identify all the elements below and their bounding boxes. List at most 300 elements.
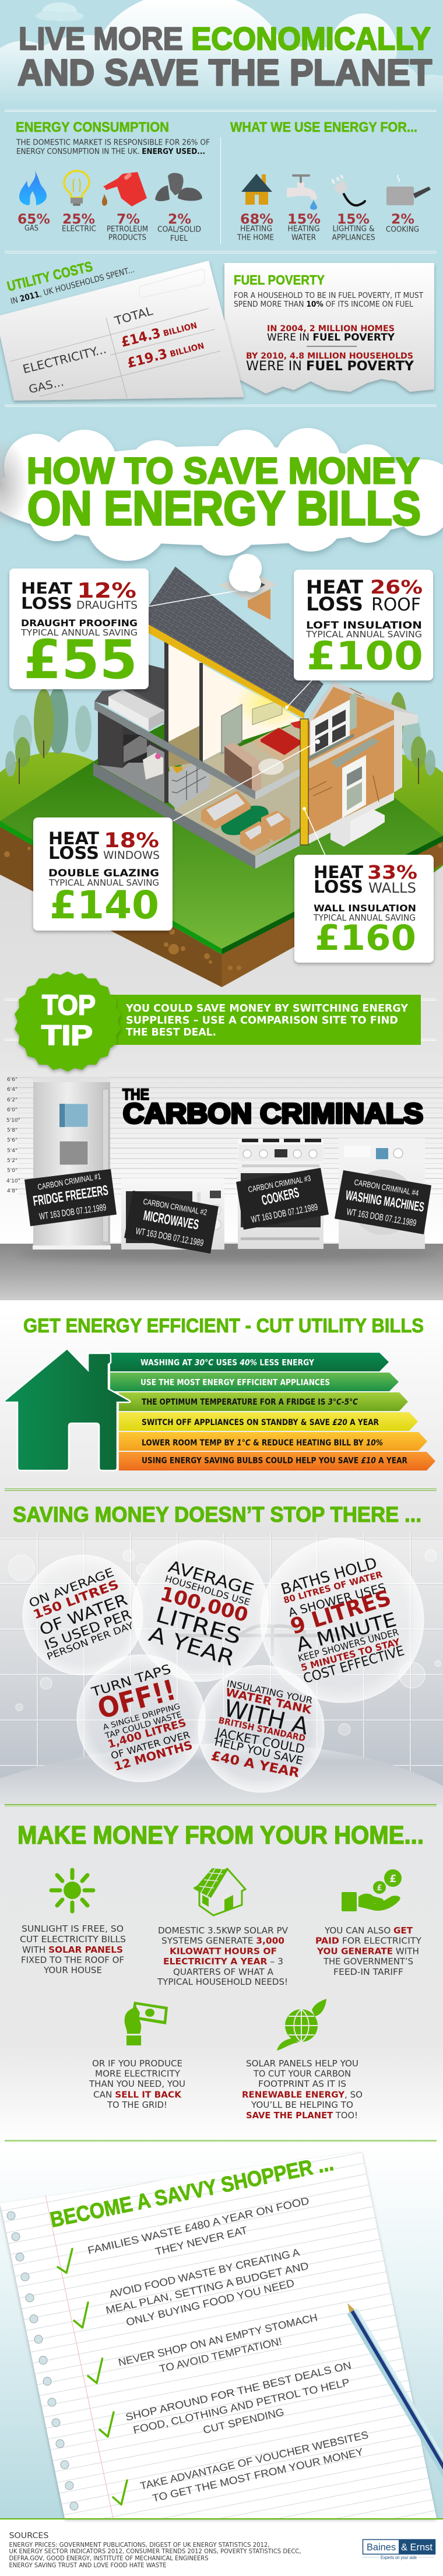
stat: heating the home 68%: THE HOME <box>237 234 274 243</box>
callout: roof: £100 <box>307 633 423 679</box>
text: solar pv systems <box>157 1925 289 1987</box>
upper walls <box>164 640 306 803</box>
sources: DEFRA.GOV, GOOD ENERGY, INSTITUTE OF MECHANICAL ENGINEERS <box>9 2555 209 2562</box>
stat: electric 25% <box>62 212 96 233</box>
bubble: water tank jacket: WITH A <box>222 1695 311 1740</box>
appliance shadows <box>17 1245 437 1262</box>
bed and wardrobe <box>224 721 300 794</box>
bubble: 150 litres <box>23 1555 143 1675</box>
icon: light bulb <box>64 171 89 206</box>
stat: cooking 2%: 2% <box>391 212 414 227</box>
scene: hills and trees <box>0 686 443 885</box>
appliance: washing machine <box>339 1138 425 1249</box>
text: sunlight is free: WITH SOLAR PANELS <box>22 1945 123 1955</box>
clouds behind the title <box>0 0 443 137</box>
text: sunlight is free: CUT ELECTRICITY BILLS <box>20 1934 126 1945</box>
placard: microwaves: MICROWAVES <box>142 1208 200 1233</box>
placard: cookers: COOKERS <box>260 1185 301 1209</box>
height chart wall: 4'8" <box>7 1188 17 1194</box>
bubble: baths and showers: KEEP SHOWERS UNDER <box>297 1626 400 1664</box>
heading: fuel poverty: FUEL POVERTY <box>234 272 325 287</box>
gable wall with brickwork <box>308 681 418 847</box>
intro text <box>16 139 210 156</box>
placard: microwaves: WT 163 DOB 07.12.1989 <box>135 1226 204 1248</box>
bubble: baths and showers: BATHS HOLD <box>279 1554 379 1599</box>
stat: electric 25%: 25% <box>62 212 95 227</box>
stat: gas 65%: 65% <box>17 212 50 227</box>
arrow: energy saving bulbs: USING ENERGY SAVING BULBS COULD HELP YOU SAVE £10 A YEAR <box>142 1457 407 1466</box>
stat: heating water 15% <box>287 212 321 243</box>
placard: washing machines: CARBON CRIMINAL #4 <box>353 1177 420 1198</box>
bubble: baths and showers: A MINUTE <box>294 1608 399 1656</box>
bubble: baths and showers: COST EFFECTIVE <box>301 1643 406 1687</box>
stat: coal 2%: COAL/SOLID <box>157 226 201 234</box>
window <box>309 692 357 760</box>
text: solar panels help: TO CUT YOUR CARBON <box>253 2069 351 2079</box>
floor beam <box>94 701 300 800</box>
stat: 2010: BY 2010, 4.8 MILLION HOUSEHOLDS <box>246 352 413 361</box>
callout: windows: WINDOWS <box>103 849 160 862</box>
placard: microwaves: CARBON CRIMINAL #2 <box>142 1196 208 1217</box>
plant and flowers <box>155 753 183 773</box>
tick: empty stomach: TO AVOID TEMPTATION! <box>158 2335 283 2375</box>
row: gas: £19.3 BILLION <box>125 337 206 371</box>
callout: roof: LOFT INSULATION <box>306 620 422 631</box>
heading: how to save money <box>27 451 421 535</box>
bubble: water tank jacket: WATER TANK <box>224 1686 314 1717</box>
text: sell it back: OR IF YOU PRODUCE <box>92 2058 182 2069</box>
definition text: SPEND MORE THAN 10% OF ITS INCOME ON FUEL <box>234 300 414 309</box>
text: feed-in tariff: YOU GENERATE WITH <box>317 1946 419 1957</box>
icon: globe with leaves <box>277 1999 326 2051</box>
icon: house <box>241 174 272 205</box>
text: solar pv systems: KILOWATT HOURS OF <box>170 1946 277 1957</box>
callout: draughts: TYPICAL ANNUAL SAVING <box>20 627 138 638</box>
heading: how to save money: HOW TO SAVE MONEY <box>27 451 420 492</box>
icon: ballpoint pen <box>342 2300 443 2515</box>
callout: draughts: 12% <box>77 579 136 603</box>
arrow: standby <box>119 1412 418 1431</box>
stat: lighting and appliances 15%: 15% <box>337 212 370 227</box>
icon: coal <box>155 173 202 201</box>
icon: green house <box>5 1349 130 1471</box>
arrow: washing: WASHING AT 30°C USES 40% LESS ENERGY <box>140 1359 315 1368</box>
text: feed-in tariff: PAID FOR ELECTRICITY <box>315 1936 422 1946</box>
tick: shop around: SHOP AROUND FOR THE BEST DEALS ON <box>124 2359 353 2423</box>
callout: walls <box>294 855 434 963</box>
stat: heating the home 68%: 68% <box>240 212 273 227</box>
bubble: water tank jacket: INSULATING YOUR <box>226 1678 314 1706</box>
text: solar panels help: FOOTPRINT AS IT IS <box>258 2079 346 2089</box>
callout: windows: DOUBLE GLAZING <box>48 868 159 879</box>
logo: Baines & Ernst: Experts on your side <box>381 2555 417 2560</box>
item: solar pv <box>157 1868 289 1987</box>
bubble: baths and showers: 80 LITRES OF WATER <box>282 1569 384 1606</box>
stat: coal 2%: 2% <box>168 212 191 227</box>
tick: shop around: FOOD, CLOTHING AND PETROL TO HELP <box>132 2376 351 2436</box>
callout: walls: WALLS <box>368 880 416 896</box>
bubble: 150 litres: OF WATER <box>37 1591 130 1640</box>
arrow: fridge temperature: THE OPTIMUM TEMPERATURE FOR A FRIDGE IS 3°C-5°C <box>142 1398 358 1407</box>
row: gas <box>27 337 206 396</box>
item: sunlight <box>20 1870 126 1975</box>
stat: lighting and appliances 15%: LIGHTING & <box>332 225 374 233</box>
bubble: baths and showers: 5 MINUTES TO STAY <box>300 1636 401 1673</box>
torn punch holes <box>7 2212 78 2510</box>
callout: roof: HEAT <box>306 576 363 598</box>
bubble: baths and showers <box>261 1538 424 1703</box>
stat: petroleum 7%: PRODUCTS <box>108 234 146 243</box>
placard: fridge freezers: CARBON CRIMINAL #1 <box>37 1171 102 1192</box>
stat: lighting and appliances 15%: APPLIANCES <box>332 234 375 243</box>
bubble: 100,000 litres <box>132 1540 269 1682</box>
bubble: turn taps off <box>77 1655 205 1782</box>
icon: petrol can <box>102 172 147 206</box>
definition text <box>234 292 423 309</box>
row: electricity: £14.3 BILLION <box>119 317 198 350</box>
callout: roof: ROOF <box>371 595 421 615</box>
bubble: baths and showers: A SHOWER USES <box>287 1580 387 1620</box>
tick: meal plan: MEAL PLAN, SETTING A BUDGET AND <box>105 2260 310 2316</box>
icon: hand with coins <box>342 1869 402 1911</box>
callout: windows: £140 <box>50 883 159 928</box>
height chart wall: 6'2" <box>7 1097 17 1103</box>
placard: washing machines <box>335 1170 431 1234</box>
stat: 2010: WERE IN FUEL POVERTY <box>246 359 414 374</box>
bill sheet <box>0 261 244 401</box>
text: solar pv systems: ELECTRICITY A YEAR – 3 <box>163 1956 283 1967</box>
tip text <box>125 1002 409 1038</box>
heading cloud with chimney smoke <box>0 428 443 592</box>
appliance: fridge freezer <box>33 1078 111 1250</box>
appliance: cooker <box>238 1139 324 1249</box>
text: sunlight is free: SUNLIGHT IS FREE, SO <box>22 1924 124 1934</box>
bubble: 150 litres: 150 LITRES <box>31 1577 121 1622</box>
note paper <box>0 2152 437 2518</box>
sources <box>9 2532 301 2569</box>
arrow: room temperature <box>119 1432 427 1451</box>
bubble: turn taps off: TURN TAPS <box>89 1662 173 1700</box>
badge text: TIP <box>41 1020 93 1051</box>
stat: petroleum 7%: 7% <box>117 212 140 227</box>
callout: walls: TYPICAL ANNUAL SAVING <box>313 913 416 923</box>
text: solar pv systems: TYPICAL HOUSEHOLD NEEDS! <box>157 1977 288 1987</box>
tick: meal plan: ONLY BUYING FOOD YOU NEED <box>125 2277 296 2328</box>
placard: fridge freezers: WT 163 DOB 07.12.1989 <box>38 1203 107 1222</box>
illustration: cutaway house <box>93 567 418 869</box>
tick list <box>58 2195 370 2505</box>
icon: hand with banknotes <box>125 2002 168 2045</box>
bubble: water tank jacket: HELP YOU SAVE <box>213 1735 304 1767</box>
row: gas: GAS... <box>27 375 65 396</box>
stat: heating the home 68% <box>237 212 274 243</box>
small bubbles <box>9 1550 441 1735</box>
placard: cookers: WT 163 DOB 07.12.1989 <box>251 1202 319 1225</box>
steps <box>331 809 385 847</box>
text: feed-in tariff: THE GOVERNMENT’S <box>323 1956 413 1967</box>
text: solar panels help: SAVE THE PLANET TOO! <box>246 2110 358 2121</box>
heading: the carbon criminals <box>122 1086 423 1129</box>
title: LIVE MORE ECONOMICALLY <box>19 20 431 57</box>
text: sell it back: MORE ELECTRICITY <box>95 2069 181 2079</box>
text: solar pv systems: DOMESTIC 3.5KWP SOLAR PV <box>158 1925 289 1936</box>
bubble: 100,000 litres: 100,000 <box>158 1582 251 1627</box>
placard: fridge freezers: FRIDGE FREEZERS <box>32 1182 109 1209</box>
height chart wall: 5'4" <box>7 1148 17 1154</box>
panel: utility costs bill <box>0 259 244 401</box>
bubble: water tank jacket: BRITISH STANDARD <box>217 1715 307 1744</box>
chimney <box>219 573 276 620</box>
callout: roof: 26% <box>370 576 423 598</box>
text: sell it back: THAN YOU NEED, YOU <box>89 2079 185 2089</box>
definition text: FOR A HOUSEHOLD TO BE IN FUEL POVERTY, IT MUST <box>234 292 423 300</box>
callout lines <box>149 590 325 855</box>
callout: walls: £160 <box>315 918 416 959</box>
text: solar panels help: RENEWABLE ENERGY, SO <box>242 2090 363 2100</box>
panel: fuel poverty <box>224 263 434 394</box>
bubble: turn taps off: OFF!! <box>94 1673 179 1726</box>
tick: shop around: CUT SPENDING <box>202 2406 285 2436</box>
height chart wall: 6'4" <box>7 1087 17 1093</box>
text: solar panels help <box>242 2058 363 2121</box>
tick: food waste <box>58 2195 310 2273</box>
item: sell it back <box>89 2002 185 2110</box>
callout: top tip <box>15 971 421 1072</box>
title <box>17 20 432 93</box>
callout: draughts: £55 <box>23 629 138 691</box>
heading: the carbon criminals: THE <box>122 1086 149 1103</box>
icon: hand with coins: £ <box>377 1884 382 1893</box>
callout: walls: WALL INSULATION <box>314 903 416 914</box>
sources: ENERGY PRICES: GOVERNMENT PUBLICATIONS, DIGEST OF UK ENERGY STATISTICS 2012, <box>9 2542 269 2549</box>
door <box>331 738 379 818</box>
badge <box>15 971 121 1072</box>
sources: SOURCES <box>9 2532 49 2540</box>
callout: windows: HEAT <box>48 829 99 848</box>
heading: utility costs: UTILITY COSTS <box>6 259 94 294</box>
heading: the carbon criminals: CARBON CRIMINALS <box>123 1099 423 1129</box>
height chart wall: 5'0" <box>7 1168 17 1174</box>
arrow: room temperature: LOWER ROOM TEMP BY 1°C & REDUCE HEATING BILL BY 10% <box>142 1438 383 1448</box>
bubble: 100,000 litres: AVERAGE <box>166 1557 256 1599</box>
panel: energy consumption <box>16 120 210 243</box>
banner <box>109 995 421 1045</box>
callout: draughts <box>9 568 149 691</box>
placard: fridge freezers <box>24 1169 117 1226</box>
icon: solar house <box>194 1868 245 1915</box>
row: electricity: ELECTRICITY... <box>21 342 108 376</box>
callout: windows: 18% <box>104 829 159 852</box>
text: sell it back <box>89 2058 185 2110</box>
sources: UK ENERGY SECTOR INDICATORS 2012, CONSUMER TRENDS 2012 ONS, POVERTY STATISTICS DECC, <box>9 2548 301 2555</box>
appliance: microwave <box>121 1178 224 1250</box>
title: AND SAVE THE PLANET <box>17 52 432 93</box>
height chart wall: 6'6" <box>7 1077 17 1083</box>
text: solar pv systems: QUARTERS OF WHAT A <box>173 1967 274 1977</box>
callout: windows: TYPICAL ANNUAL SAVING <box>48 878 159 888</box>
height chart wall: 5'8" <box>7 1128 17 1133</box>
stat: petroleum 7%: PETROLEUM <box>107 225 148 234</box>
stat: 2004: IN 2004, 2 MILLION HOMES <box>267 324 395 334</box>
bubble: turn taps off: A SINGLE DRIPPING <box>102 1702 181 1732</box>
bubble: 100,000 litres: A YEAR <box>146 1622 237 1671</box>
column header: TOTAL <box>112 304 155 328</box>
bubble: turn taps off: TAP COULD WASTE <box>104 1710 183 1741</box>
arrow: efficient appliances: USE THE MOST ENERGY EFFICIENT APPLIANCES <box>140 1378 330 1388</box>
text: sell it back: CAN SELL IT BACK <box>93 2090 182 2100</box>
callout: walls: HEAT <box>314 862 363 882</box>
badge text: TOP <box>42 990 96 1021</box>
row: electricity <box>21 317 198 376</box>
sources: ENERGY SAVING TRUST AND LOVE FOOD HATE WASTE <box>9 2562 167 2569</box>
bubble: 100,000 litres: HOUSEHOLDS USE <box>164 1574 251 1608</box>
tick: empty stomach: NEVER SHOP ON AN EMPTY STOMACH <box>117 2311 319 2368</box>
tick: empty stomach <box>88 2311 319 2383</box>
logo: Baines & Ernst: Baines <box>367 2542 396 2553</box>
text: solar panels help: YOU’LL BE HELPING TO <box>251 2100 353 2110</box>
panel: what we use energy for <box>230 120 431 243</box>
tip text: SUPPLIERS – USE A COMPARISON SITE TO FIND <box>126 1015 398 1026</box>
logo: Baines & Ernst <box>363 2540 435 2560</box>
arrow: fridge temperature <box>119 1392 408 1411</box>
callout: roof <box>294 570 433 680</box>
lower rooms <box>98 711 300 856</box>
callout: walls: 33% <box>367 861 417 883</box>
callout: roof: TYPICAL ANNUAL SAVING <box>305 629 422 640</box>
text: sunlight is free: FIXED TO THE ROOF OF <box>21 1954 124 1965</box>
stat: petroleum 7% <box>107 212 148 243</box>
intro text: THE DOMESTIC MARKET IS RESPONSIBLE FOR 26% OF <box>16 139 210 147</box>
callout: draughts: HEAT <box>21 580 73 598</box>
text: sunlight is free <box>20 1924 126 1975</box>
bathroom <box>94 665 164 731</box>
tick: vouchers: TAKE ADVANTAGE OF VOUCHER WEBSITES <box>139 2429 370 2492</box>
callout: draughts: LOSS <box>21 594 72 613</box>
icon: hand with coins: £ <box>389 1873 397 1885</box>
callout: walls: LOSS <box>314 877 363 897</box>
height chart wall: 5'10" <box>6 1118 20 1124</box>
bubble: turn taps off: OF WATER OVER <box>110 1729 191 1761</box>
energy rating arrows <box>110 1353 435 1471</box>
sofa <box>201 791 251 829</box>
armchairs <box>240 810 290 851</box>
text: sell it back: TO THE GRID! <box>107 2100 167 2110</box>
roof <box>149 567 324 713</box>
tick: vouchers: TO GET THE MOST FROM YOUR MONEY <box>152 2446 364 2504</box>
text: feed-in tariff <box>315 1925 422 1977</box>
stat: cooking 2%: COOKING <box>386 226 419 234</box>
heading: energy consumption: ENERGY CONSUMPTION <box>16 120 169 135</box>
heading: become a savvy shopper: BECOME A SAVVY SHOPPER ... <box>48 2151 336 2232</box>
bubble: 150 litres: PERSON PER DAY <box>45 1620 135 1662</box>
tick: shop around <box>100 2359 353 2437</box>
icon: gas flame <box>19 170 47 205</box>
stat: coal 2%: FUEL <box>170 234 188 243</box>
heading: saving money doesn't stop there: SAVING MONEY DOESN’T STOP THERE ... <box>13 1503 421 1526</box>
callout: roof: LOSS <box>306 593 363 615</box>
callout: windows <box>33 817 173 931</box>
bubble: 150 litres: IS USED PER <box>43 1607 133 1654</box>
logo: Baines & Ernst: & Ernst <box>401 2542 433 2553</box>
bubble: turn taps off: 1,400 LITRES <box>107 1717 188 1751</box>
loft insulation strip <box>149 624 304 719</box>
icon: cooking pot <box>386 175 431 205</box>
height chart wall: 4'10" <box>6 1178 20 1184</box>
heading: what we use energy for: WHAT WE USE ENERGY FOR... <box>230 120 417 135</box>
icon: sun <box>51 1870 93 1911</box>
stat: cooking 2% <box>386 212 419 234</box>
stat: 2010 <box>246 352 414 374</box>
intro text: ENERGY CONSUMPTION IN THE UK. ENERGY USED... <box>16 148 205 156</box>
torn paper sheet <box>224 263 434 394</box>
item: feed-in tariff <box>315 1869 422 1977</box>
bubble: water tank jacket: JACKET COULD <box>214 1725 306 1756</box>
placard: microwaves <box>124 1191 219 1254</box>
callout: windows: LOSS <box>48 843 99 863</box>
placard: cookers <box>236 1168 329 1230</box>
icon: plug <box>332 175 365 205</box>
badge text <box>41 990 96 1051</box>
stat: lighting and appliances 15% <box>332 212 375 243</box>
stat: 2004: WERE IN FUEL POVERTY <box>267 332 395 343</box>
callout: draughts: DRAUGHT PROOFING <box>21 617 138 629</box>
tick: vouchers <box>113 2429 370 2505</box>
stat: electric 25%: ELECTRIC <box>62 225 96 233</box>
stat: heating water 15%: 15% <box>287 212 321 227</box>
icon: tap <box>287 176 317 210</box>
stat: heating water 15%: HEATING <box>288 225 319 233</box>
item: save the planet <box>242 1999 363 2121</box>
scene: green ground block <box>0 688 443 987</box>
stat: coal 2% <box>157 212 201 243</box>
height chart wall: 5'2" <box>7 1158 17 1164</box>
callout: draughts: DRAUGHTS <box>76 599 138 612</box>
bubble: 100,000 litres: LITRES <box>153 1602 244 1650</box>
text: solar pv systems: SYSTEMS GENERATE 3,000 <box>161 1936 284 1946</box>
stat: heating the home 68%: HEATING <box>240 225 272 233</box>
arrow: washing <box>110 1353 389 1371</box>
text: solar panels help: SOLAR PANELS HELP YOU <box>246 2058 358 2069</box>
height chart wall: 6'0" <box>7 1107 17 1113</box>
arrow: efficient appliances <box>110 1373 399 1391</box>
bubble: 150 litres: ON AVERAGE <box>27 1565 116 1610</box>
tick: food waste: FAMILIES WASTE £480 A YEAR ON FOOD <box>86 2195 310 2256</box>
bubble: water tank jacket <box>198 1665 324 1792</box>
tick: meal plan: AVOID FOOD WASTE BY CREATING A <box>108 2247 301 2300</box>
stat: 2004 <box>267 324 395 343</box>
bubble: baths and showers: 9 LITRES <box>287 1585 394 1640</box>
text: feed-in tariff: YOU CAN ALSO GET <box>324 1925 413 1936</box>
bubble: turn taps off: 12 MONTHS <box>112 1738 194 1774</box>
foundation slab <box>93 763 300 869</box>
bubble: water tank jacket: £40 A YEAR <box>210 1749 301 1781</box>
stat: heating water 15%: WATER <box>291 234 316 243</box>
tip text: YOU COULD SAVE MONEY BY SWITCHING ENERGY <box>125 1002 409 1015</box>
subheading: IN 2011, UK HOUSEHOLDS SPENT... <box>9 265 135 306</box>
tip text: THE BEST DEAL. <box>126 1026 216 1038</box>
text: feed-in tariff: FEED-IN TARIFF <box>333 1967 403 1977</box>
wall insulation strip <box>300 719 308 845</box>
text: sunlight is free: YOUR HOUSE <box>43 1965 102 1975</box>
height chart wall <box>6 1077 443 1194</box>
panel: savvy shopper notepad <box>0 2151 443 2518</box>
tick: meal plan <box>74 2247 310 2328</box>
tick: food waste: THEY NEVER EAT <box>154 2224 248 2258</box>
placard: cookers: CARBON CRIMINAL #3 <box>247 1173 311 1194</box>
height chart wall: 5'6" <box>7 1138 17 1143</box>
arrow: energy saving bulbs <box>119 1452 435 1471</box>
stat: gas 65%: GAS <box>24 224 38 233</box>
